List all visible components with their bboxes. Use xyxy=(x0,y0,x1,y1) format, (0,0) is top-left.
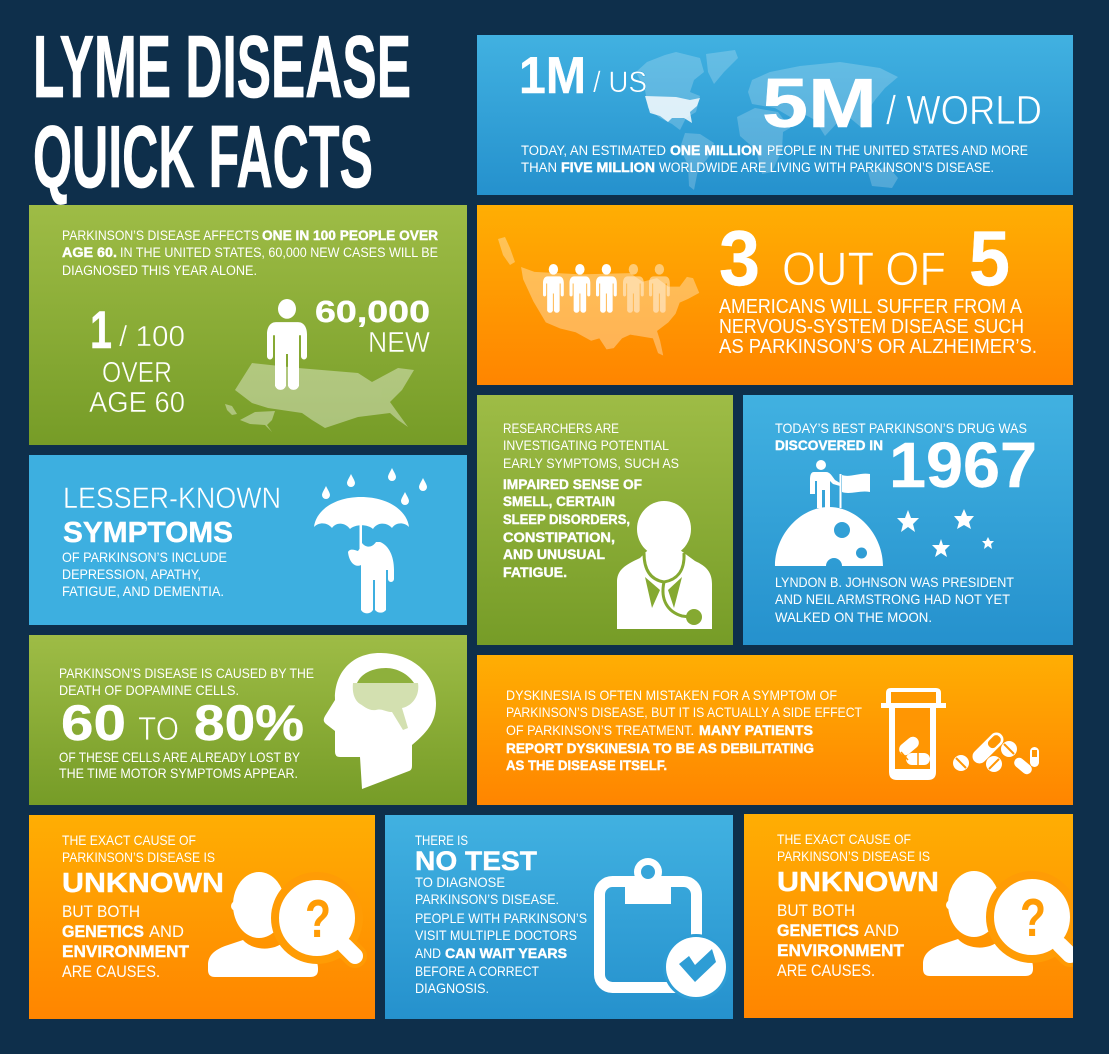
60,000 new figure: 60,000 xyxy=(315,294,430,329)
1M US figure: / US xyxy=(593,66,647,99)
prevalence text: ONE MILLION xyxy=(670,143,762,158)
unknown text: THE EXACT CAUSE OF xyxy=(777,831,911,847)
prevalence text: FIVE MILLION xyxy=(561,160,655,175)
researchers text: SMELL, CERTAIN xyxy=(503,493,615,509)
no test text: NO TEST xyxy=(415,846,538,876)
unknown text: UNKNOWN xyxy=(62,867,224,898)
unknown text: ENVIRONMENT xyxy=(777,941,905,960)
icon: US map with five people xyxy=(498,237,699,356)
dopamine text: OF THESE CELLS ARE ALREADY LOST BY xyxy=(59,749,301,765)
3 out of 5 figure: 5 xyxy=(969,214,1010,302)
unknown text: AND xyxy=(149,922,184,941)
dopamine text xyxy=(59,665,314,781)
affects text: ONE IN 100 PEOPLE OVER xyxy=(262,228,438,243)
unknown text: GENETICS xyxy=(62,922,144,941)
symptoms text: LESSER-KNOWN xyxy=(63,482,281,515)
symptoms text xyxy=(62,482,281,599)
dyskinesia text: REPORT DYSKINESIA TO BE AS DEBILITATING xyxy=(506,740,814,756)
researchers text: RESEARCHERS ARE xyxy=(503,420,619,436)
dopamine text: 60 xyxy=(61,695,126,751)
no test text: VISIT MULTIPLE DOCTORS xyxy=(415,927,577,943)
drug text: TODAY’S BEST PARKINSON’S DRUG WAS xyxy=(775,420,1027,436)
researchers text: AND UNUSUAL xyxy=(503,546,605,562)
icon: head with brain xyxy=(324,653,436,789)
title: LYME DISEASE xyxy=(33,17,411,116)
dyskinesia text: PARKINSON’S DISEASE, BUT IT IS ACTUALLY A SIDE EFFECT xyxy=(506,704,862,720)
symptoms text: OF PARKINSON’S INCLUDE xyxy=(62,549,227,565)
no test text: PEOPLE WITH PARKINSON’S xyxy=(415,910,587,926)
americans text: AMERICANS WILL SUFFER FROM A xyxy=(719,296,1023,318)
johnson text: LYNDON B. JOHNSON WAS PRESIDENT xyxy=(775,574,1014,590)
60,000 new figure xyxy=(315,294,431,359)
americans text: NERVOUS-SYSTEM DISEASE SUCH xyxy=(719,316,1024,338)
panel: cause unknown left xyxy=(29,815,375,1019)
unknown text: GENETICS xyxy=(777,921,859,940)
researchers text: IMPAIRED SENSE OF xyxy=(503,476,642,492)
prevalence text: THAN xyxy=(521,160,557,175)
dopamine text: TO xyxy=(138,710,179,747)
icon: person and magnifier xyxy=(208,872,359,977)
drug text: DISCOVERED IN xyxy=(775,437,883,453)
panel: lesser-known symptoms xyxy=(29,455,467,625)
prevalence text xyxy=(521,143,1028,175)
drug text xyxy=(775,420,1027,453)
1/100 over age 60 figure: / 100 xyxy=(119,321,185,353)
60,000 new figure: NEW xyxy=(368,327,431,359)
1/100 over age 60 figure: AGE 60 xyxy=(89,387,185,419)
icon: US map with person xyxy=(225,299,414,432)
unknown text xyxy=(777,831,939,980)
unknown text: ARE CAUSES. xyxy=(62,962,160,981)
no test text: DIAGNOSIS. xyxy=(415,980,489,996)
no test text: PARKINSON’S DISEASE. xyxy=(415,891,559,907)
no test text: CAN WAIT YEARS xyxy=(445,945,567,961)
americans text: AS PARKINSON’S OR ALZHEIMER’S. xyxy=(719,336,1037,358)
affects text: IN THE UNITED STATES, 60,000 NEW CASES WILL BE xyxy=(120,245,438,260)
panel: global prevalence xyxy=(477,35,1073,195)
symptoms text: SYMPTOMS xyxy=(63,517,233,549)
world map xyxy=(636,50,898,190)
researchers text: EARLY SYMPTOMS, SUCH AS xyxy=(503,455,679,471)
no test text: THERE IS xyxy=(415,832,468,848)
3 out of 5 figure: OUT OF xyxy=(782,242,946,295)
unknown text: BUT BOTH xyxy=(777,901,855,920)
unknown text: UNKNOWN xyxy=(777,866,939,897)
johnson text xyxy=(775,574,1014,625)
icon: clipboard with check xyxy=(600,858,729,1000)
unknown text xyxy=(62,832,224,981)
1M US figure: 1M xyxy=(519,47,586,105)
affects text xyxy=(62,228,438,278)
johnson text: WALKED ON THE MOON. xyxy=(775,609,932,625)
icon: stars xyxy=(897,509,994,557)
panel: early symptoms xyxy=(477,395,733,645)
researchers text: INVESTIGATING POTENTIAL xyxy=(503,437,669,453)
icon: doctor with stethoscope xyxy=(617,501,712,629)
panel: dyskinesia xyxy=(477,655,1073,805)
3 out of 5 figure xyxy=(719,214,1010,302)
3 out of 5 figure: 3 xyxy=(719,214,760,302)
1/100 over age 60 figure xyxy=(89,301,185,419)
icon: pill bottle xyxy=(881,688,946,780)
americans text xyxy=(719,296,1037,358)
affects text: DIAGNOSED THIS YEAR ALONE. xyxy=(62,263,257,278)
affects text: PARKINSON’S DISEASE AFFECTS xyxy=(62,228,259,243)
1/100 over age 60 figure: OVER xyxy=(102,357,172,389)
researchers text xyxy=(503,420,679,580)
icon: person under umbrella in rain xyxy=(314,468,427,613)
prevalence text: TODAY, AN ESTIMATED xyxy=(521,143,666,158)
unknown text: THE EXACT CAUSE OF xyxy=(62,832,196,848)
icon: person and magnifier xyxy=(923,871,1074,976)
1967 figure: 1967 xyxy=(889,429,1037,501)
unknown text: PARKINSON’S DISEASE IS xyxy=(777,848,930,864)
5M world figure: 5M xyxy=(762,64,877,142)
1/100 over age 60 figure: 1 xyxy=(90,301,112,360)
researchers text: CONSTIPATION, xyxy=(503,529,615,545)
panel: one in 100 xyxy=(29,205,467,445)
1M US figure xyxy=(519,47,647,105)
unknown text: PARKINSON’S DISEASE IS xyxy=(62,849,215,865)
icon: person and magnifier: ? xyxy=(1020,888,1046,948)
unknown text: BUT BOTH xyxy=(62,902,140,921)
prevalence text: WORLDWIDE ARE LIVING WITH PARKINSON’S DISEASE. xyxy=(659,160,994,175)
title xyxy=(33,17,411,206)
unknown text: ARE CAUSES. xyxy=(777,961,875,980)
icon: loose pills xyxy=(953,730,1039,776)
prevalence text: PEOPLE IN THE UNITED STATES AND MORE xyxy=(767,143,1028,158)
panel: 3 out of 5 xyxy=(477,205,1073,385)
icon: highlighted US map xyxy=(645,96,700,123)
dyskinesia text xyxy=(506,687,862,773)
dopamine text: DEATH OF DOPAMINE CELLS. xyxy=(59,682,239,698)
affects text: AGE 60. xyxy=(62,245,117,260)
no test text: AND xyxy=(415,945,441,961)
researchers text: SLEEP DISORDERS, xyxy=(503,511,630,527)
no test text xyxy=(415,832,587,996)
icon: astronaut on moon with flag xyxy=(775,460,883,566)
5M world figure: / WORLD xyxy=(886,87,1042,133)
dyskinesia text: MANY PATIENTS xyxy=(699,722,813,738)
symptoms text: DEPRESSION, APATHY, xyxy=(62,566,201,582)
panel: dopamine cells xyxy=(29,635,467,805)
symptoms text: FATIGUE, AND DEMENTIA. xyxy=(62,583,224,599)
title: QUICK FACTS xyxy=(33,107,373,206)
icon: person and magnifier: ? xyxy=(305,889,331,949)
dyskinesia text: DYSKINESIA IS OFTEN MISTAKEN FOR A SYMPTOM OF xyxy=(506,687,837,703)
no test text: TO DIAGNOSE xyxy=(415,874,505,890)
unknown text: ENVIRONMENT xyxy=(62,942,190,961)
dopamine text: PARKINSON’S DISEASE IS CAUSED BY THE xyxy=(59,665,314,681)
5M world figure xyxy=(762,64,1042,142)
panel: cause unknown right xyxy=(744,814,1074,1018)
dopamine text: 80% xyxy=(194,695,304,751)
johnson text: AND NEIL ARMSTRONG HAD NOT YET xyxy=(775,591,1010,607)
panel: no test xyxy=(385,815,733,1019)
dyskinesia text: OF PARKINSON’S TREATMENT. xyxy=(506,722,694,738)
dopamine text: THE TIME MOTOR SYMPTOMS APPEAR. xyxy=(59,765,298,781)
researchers text: FATIGUE. xyxy=(503,564,567,580)
no test text: BEFORE A CORRECT xyxy=(415,963,539,979)
unknown text: AND xyxy=(864,921,899,940)
dyskinesia text: AS THE DISEASE ITSELF. xyxy=(506,757,667,773)
panel: 1967 drug xyxy=(743,395,1073,645)
